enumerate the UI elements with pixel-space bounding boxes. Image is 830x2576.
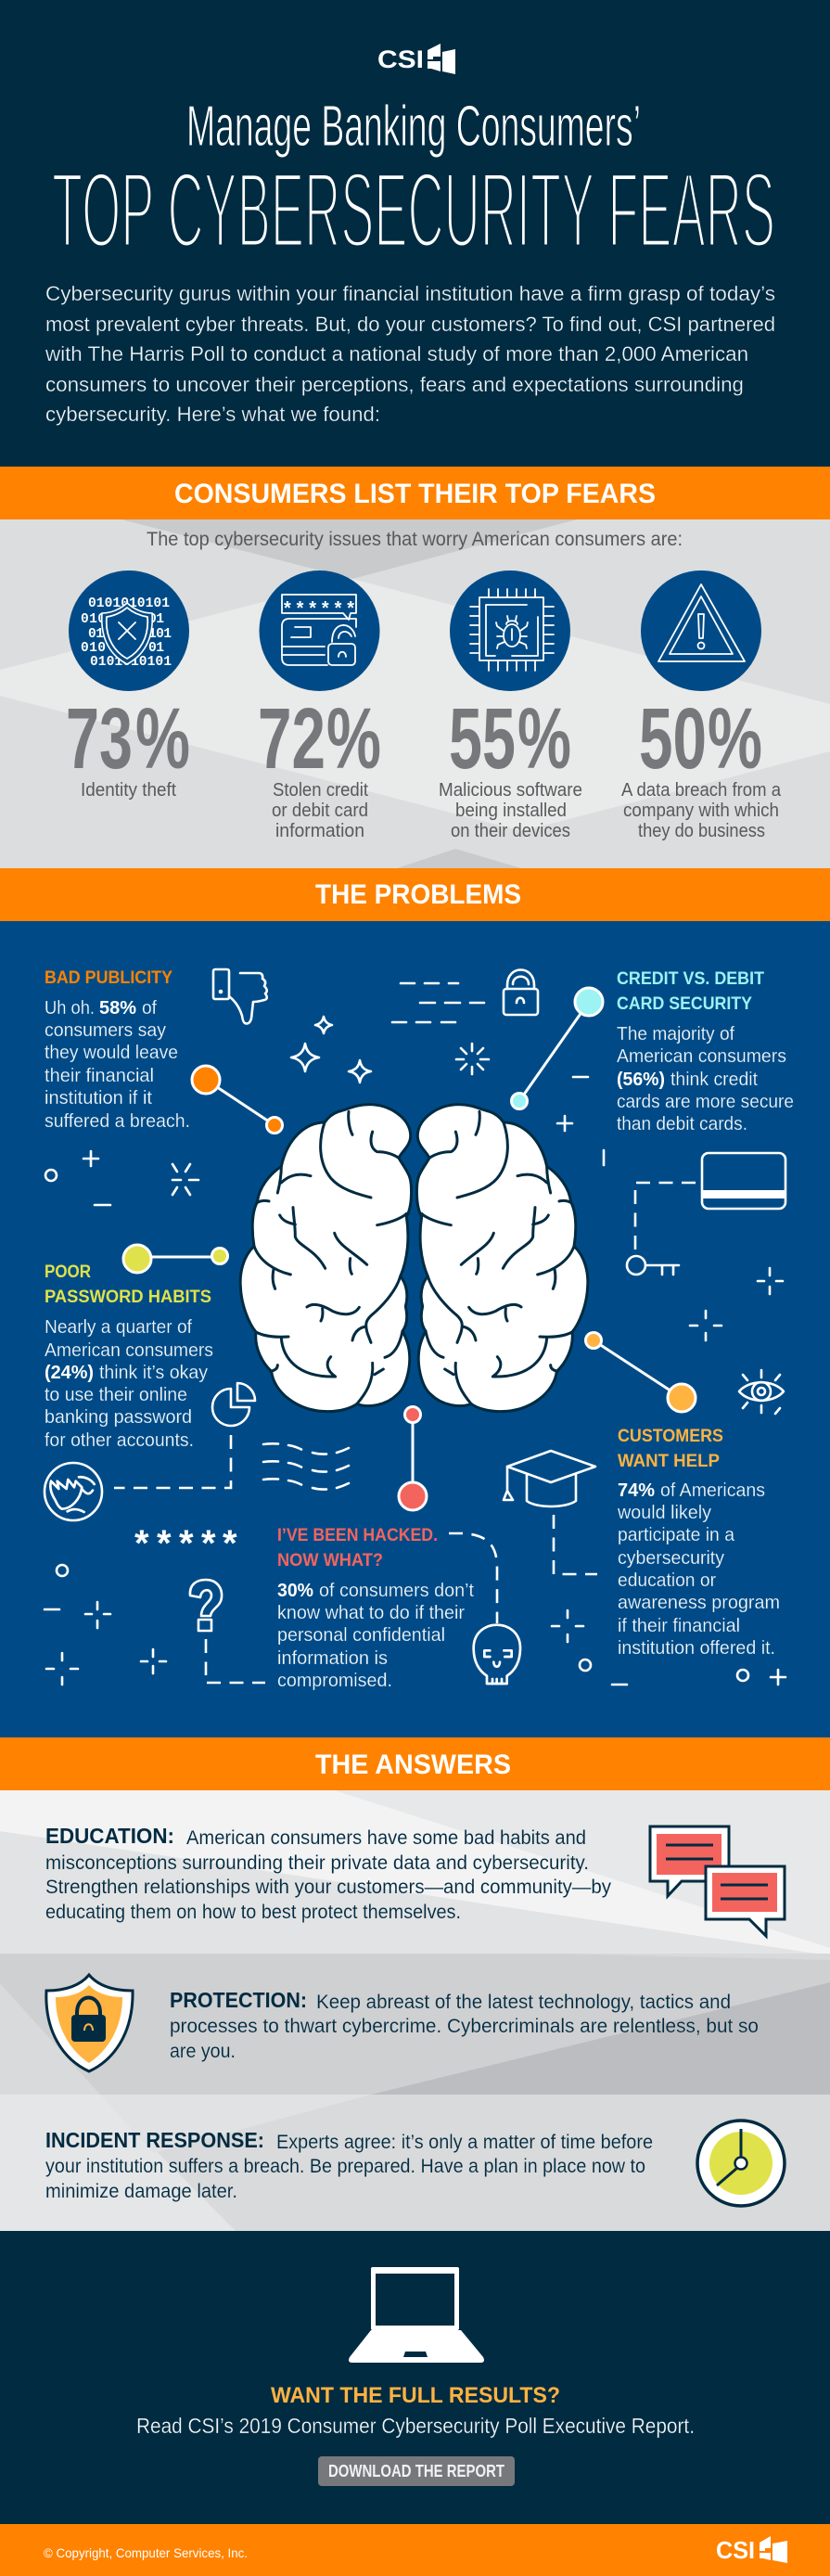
text: customers want help: CUSTOMERS	[618, 1426, 723, 1446]
text: bad publicity: consumers say	[45, 1019, 167, 1041]
stat: 72 percent: %	[326, 690, 381, 787]
text: poor password habits: to use their online	[45, 1384, 187, 1405]
stat: 55 percent: being installed	[455, 801, 567, 821]
icon: speech bubbles	[650, 1826, 785, 1936]
text block: EDUCATION:	[45, 1824, 174, 1848]
stat: 72 percent: information	[275, 821, 364, 841]
icon: lock	[504, 970, 538, 1015]
icon: stolen card	[260, 570, 380, 691]
text: bad publicity: suffered a breach.	[45, 1110, 190, 1132]
icon: shield with lock	[46, 1975, 133, 2071]
text: customers want help: if their financial	[618, 1615, 740, 1636]
stat: 50 percent: 50	[639, 690, 707, 787]
icon: credit card and key	[627, 1153, 785, 1275]
intro paragraph: most prevalent cyber threats. But, do your customers? To find out, CSI partnered	[45, 313, 775, 336]
text: credit vs debit: CARD SECURITY	[617, 993, 752, 1014]
text: bad publicity: BAD PUBLICITY	[45, 968, 172, 988]
text: customers want help: cybersecurity	[618, 1547, 725, 1569]
intro paragraph: consumers to uncover their perceptions, fears and expectations surrounding	[45, 373, 744, 396]
text block: minimize damage later.	[45, 2181, 237, 2202]
stat: 72 percent: 72	[258, 690, 326, 787]
intro paragraph	[45, 282, 775, 426]
text: poor password habits: (24%)	[45, 1362, 94, 1383]
icon: password asterisks: *****	[134, 1523, 237, 1564]
stat: 72 percent: Stolen credit	[273, 780, 368, 801]
text: poor password habits	[45, 1262, 213, 1451]
text: bad publicity: their financial	[45, 1065, 154, 1086]
text: I've been hacked	[277, 1525, 474, 1691]
logo: CSI footer	[716, 2536, 787, 2564]
text block: PROTECTION:	[170, 1988, 307, 2012]
heading: want the full results: WANT THE FULL RESULTS?	[271, 2383, 560, 2408]
logo: CSI: CSI	[377, 45, 424, 73]
icon: identity theft: 0101010101	[90, 655, 172, 670]
stat: 55 percent: on their devices	[451, 821, 570, 841]
panel: the problems	[0, 921, 830, 1737]
text: I've been hacked: of consumers don’t	[319, 1580, 474, 1601]
text: bad publicity: of	[142, 997, 157, 1019]
stat: 55 percent	[439, 690, 582, 841]
icon: identity theft: 010	[81, 641, 106, 656]
text: credit vs debit: think credit	[670, 1069, 758, 1090]
text: poor password habits: for other accounts.	[45, 1429, 194, 1451]
heading: consumers list their top fears	[0, 467, 830, 519]
text block: educating them on how to best protect themselves.	[45, 1902, 461, 1923]
text: bad publicity	[45, 968, 190, 1132]
icon: pie chart and facepalm	[45, 1383, 255, 1520]
stat: 50 percent: %	[708, 690, 762, 787]
text: bad publicity: 58%	[99, 997, 136, 1019]
text: customers want help: of Americans	[660, 1480, 765, 1501]
panel: education	[0, 1790, 830, 1954]
text: credit vs debit: than debit cards.	[617, 1113, 747, 1134]
icon: wavy dashes	[263, 1443, 349, 1490]
stat: 50 percent: they do business	[638, 821, 765, 841]
text: credit vs debit: (56%)	[617, 1069, 665, 1090]
icon: stolen card: ******	[284, 598, 354, 619]
text: credit vs debit: CREDIT VS. DEBIT	[617, 968, 764, 989]
text: customers want help: 74%	[618, 1480, 655, 1501]
text block: are you.	[170, 2041, 236, 2062]
stat: 50 percent: company with which	[623, 801, 779, 821]
stat: 72 percent	[258, 690, 381, 841]
icon: data breach warning	[641, 570, 761, 691]
button: download the report	[318, 2456, 515, 2486]
heading: the answers	[0, 1737, 830, 1790]
text block: Strengthen relationships with your customers—and community—by	[45, 1877, 611, 1898]
text: report line: Read CSI’s 2019 Consumer Cybersecurity Poll Executive Report.	[136, 2414, 695, 2438]
icon: identity theft	[69, 570, 189, 691]
text: customers want help: education or	[618, 1570, 716, 1591]
intro paragraph: Cybersecurity gurus within your financial institution have a firm grasp of today’s	[45, 282, 775, 305]
text: bad publicity: they would leave	[45, 1042, 178, 1063]
stat: 50 percent: A data breach from a	[621, 780, 782, 801]
connector: coral	[399, 1406, 427, 1510]
icon: clock	[697, 2121, 785, 2206]
text: customers want help: would likely	[617, 1502, 712, 1523]
text: customers want help: awareness program	[618, 1592, 780, 1613]
text: customers want help: WANT HELP	[618, 1451, 720, 1471]
text: I've been hacked: 30%	[277, 1580, 313, 1601]
stat: 72 percent: or debit card	[272, 801, 368, 821]
heading: the problems: THE PROBLEMS	[315, 879, 521, 910]
text: I've been hacked: know what to do if their	[277, 1602, 465, 1623]
icon: skull	[449, 1533, 520, 1684]
text: credit vs debit: The majority of	[617, 1023, 734, 1044]
text: credit vs debit: American consumers	[617, 1045, 786, 1067]
stat: 50 percent	[621, 690, 782, 841]
icon: eye	[739, 1370, 784, 1414]
stat: 73 percent	[66, 690, 190, 801]
panel: protection	[0, 1954, 830, 2095]
logo: CSI	[377, 44, 455, 74]
text: credit vs debit	[617, 968, 794, 1134]
intro paragraph: cybersecurity. Here’s what we found:	[45, 403, 380, 426]
panel: header	[0, 0, 830, 467]
text block: American consumers have some bad habits and	[186, 1827, 586, 1849]
stat: 55 percent: Malicious software	[439, 780, 582, 801]
text: bad publicity: Uh oh.	[45, 997, 95, 1019]
text: I've been hacked: NOW WHAT?	[277, 1550, 383, 1570]
stat: 73 percent: Identity theft	[81, 780, 176, 801]
text: I've been hacked: I’VE BEEN HACKED.	[277, 1525, 438, 1545]
icon: question mark	[190, 1580, 265, 1683]
icon: identity theft: 101	[148, 627, 172, 642]
icon: identity theft: 01	[148, 641, 164, 656]
text: customers want help: participate in a	[618, 1524, 735, 1545]
icon: graduation cap	[504, 1451, 597, 1574]
intro sentence: The top cybersecurity issues that worry American consumers are:	[147, 529, 683, 550]
panel: top fears	[0, 519, 830, 868]
text: poor password habits: Nearly a quarter of	[45, 1316, 192, 1338]
icon: identity theft: 01	[148, 612, 164, 627]
icon: thumbs down	[213, 969, 267, 1023]
heading: the answers: THE ANSWERS	[315, 1749, 511, 1780]
text: I've been hacked: compromised.	[277, 1670, 392, 1691]
stat: 73 percent: 73	[66, 690, 133, 787]
decorative marks	[45, 983, 785, 1685]
logo: CSI footer: CSI	[716, 2536, 755, 2564]
connector: amber	[586, 1332, 696, 1412]
copyright: © Copyright, Computer Services, Inc.	[44, 2545, 248, 2560]
text: poor password habits: American consumers	[45, 1339, 213, 1361]
text: customers want help: institution offered it.	[618, 1637, 775, 1659]
text: poor password habits: PASSWORD HABITS	[45, 1287, 211, 1307]
icon: identity theft: 010	[81, 612, 106, 627]
icon: identity theft: 0101010101	[88, 596, 170, 611]
stat: 55 percent: %	[517, 690, 571, 787]
text block: your institution suffers a breach. Be prepared. Have a plan in place now to	[45, 2156, 645, 2177]
text: poor password habits: POOR	[45, 1262, 91, 1282]
text block: INCIDENT RESPONSE:	[45, 2128, 264, 2152]
text: I've been hacked: personal confidential	[277, 1624, 445, 1646]
brain illustration	[240, 1105, 588, 1412]
panel: footer	[0, 2524, 830, 2576]
heading: consumers list their top fears: CONSUMERS LIST THEIR TOP FEARS	[174, 479, 656, 509]
text: credit vs debit: cards are more secure	[617, 1091, 794, 1112]
stat: 55 percent: 55	[449, 690, 516, 787]
connector: lime	[123, 1245, 228, 1273]
text block: misconceptions surrounding their private data and cybersecurity.	[45, 1852, 589, 1874]
text block	[170, 1988, 759, 2062]
stat: 73 percent: %	[135, 690, 190, 787]
icon: identity theft: 01	[88, 627, 104, 642]
heading: the problems	[0, 868, 830, 921]
button: download the report: DOWNLOAD THE REPORT	[328, 2462, 504, 2480]
text: poor password habits: banking password	[45, 1406, 192, 1428]
text block	[45, 1824, 611, 1923]
icon: laptop	[349, 2267, 484, 2363]
panel: call to action	[0, 2231, 830, 2524]
connector: cyan	[512, 988, 603, 1109]
text: customers want help	[617, 1426, 780, 1659]
text: bad publicity: institution if it	[45, 1087, 152, 1109]
text block: Experts agree: it’s only a matter of time before	[276, 2132, 653, 2153]
text block	[45, 2128, 653, 2202]
text: I've been hacked: information is	[277, 1647, 388, 1669]
intro paragraph: with The Harris Poll to conduct a national study of more than 2,000 American	[45, 342, 748, 365]
connector: orange	[192, 1066, 282, 1134]
text block: processes to thwart cybercrime. Cybercriminals are relentless, but so	[170, 2016, 759, 2037]
icon: malicious software	[450, 570, 570, 691]
text: poor password habits: think it’s okay	[99, 1362, 209, 1383]
panel: incident response	[0, 2095, 830, 2231]
text block: Keep abreast of the latest technology, tactics and	[316, 1992, 731, 2013]
